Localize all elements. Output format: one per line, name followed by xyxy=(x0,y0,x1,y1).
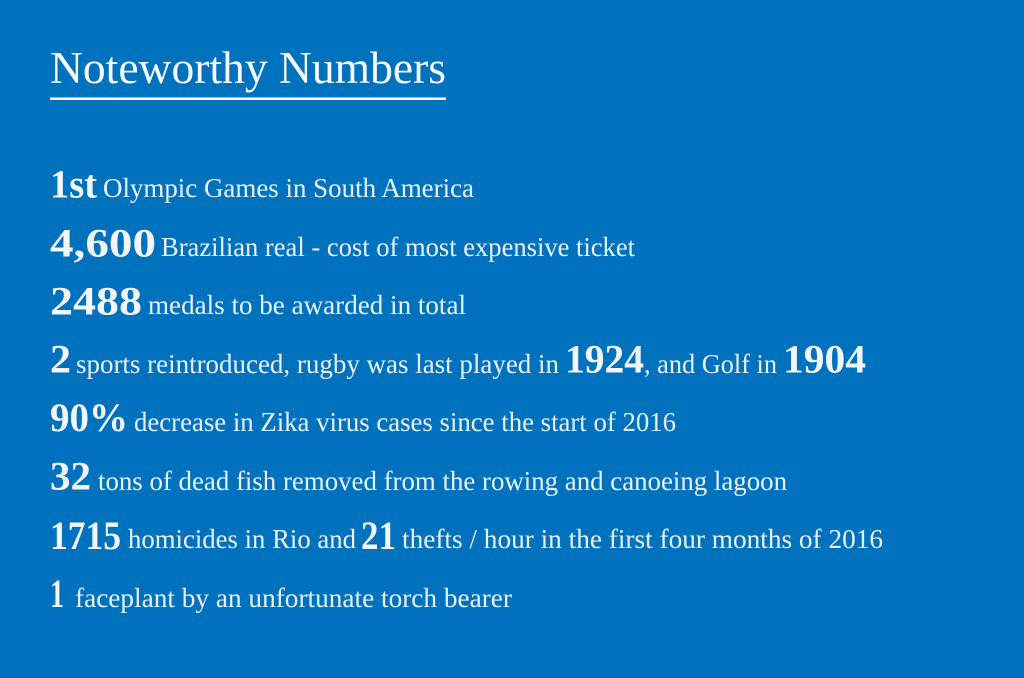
fact: 2 sports reintroduced: 1904 xyxy=(783,336,866,382)
fact: 1st Olympic Games: 1st xyxy=(50,162,98,206)
fact: 2488 medals: 2488 xyxy=(50,278,142,324)
fact: 90% decrease in Zika xyxy=(50,395,676,440)
fact: 1st Olympic Games: Olympic Games in South America xyxy=(103,173,474,203)
fact: 2 sports reintroduced: , and Golf in xyxy=(644,349,777,379)
fact: 2 sports reintroduced xyxy=(50,336,866,382)
fact: 4,600 ticket cost: Brazilian real - cost of most expensive ticket xyxy=(161,232,635,262)
fact: 1715 homicides and 21 thefts: homicides in Rio and xyxy=(128,524,356,554)
fact: 2 sports reintroduced: sports reintroduced, rugby was last played in xyxy=(76,349,559,379)
fact: 1st Olympic Games xyxy=(50,162,474,206)
fact: 4,600 ticket cost: 4,600 xyxy=(50,220,156,266)
fact: 90% decrease in Zika: 90% xyxy=(50,395,128,440)
fact: 1715 homicides and 21 thefts xyxy=(50,513,883,558)
fact: 32 tons of dead fish: tons of dead fish removed from the rowing and canoeing lagoon xyxy=(98,466,787,496)
fact: 1715 homicides and 21 thefts: 1715 xyxy=(50,513,121,558)
fact: 1715 homicides and 21 thefts: thefts / hour in the first four months of 2016 xyxy=(402,524,883,554)
fact: 1 faceplant: 1 xyxy=(50,571,64,616)
fact: 1715 homicides and 21 thefts: 21 xyxy=(361,513,396,558)
title: Noteworthy Numbers xyxy=(50,43,446,93)
fact: 2 sports reintroduced: 1924 xyxy=(565,336,644,382)
fact: 32 tons of dead fish xyxy=(50,454,787,498)
fact: 4,600 ticket cost xyxy=(50,220,635,266)
fact: 2 sports reintroduced: 2 xyxy=(50,336,71,382)
fact: 1 faceplant: faceplant by an unfortunate torch bearer xyxy=(75,583,512,613)
fact: 32 tons of dead fish: 32 xyxy=(50,454,91,498)
fact: 2488 medals xyxy=(50,278,466,324)
fact: 1 faceplant xyxy=(50,571,512,616)
fact: 2488 medals: medals to be awarded in total xyxy=(148,290,466,320)
fact: 90% decrease in Zika: decrease in Zika virus cases since the start of 2016 xyxy=(134,407,676,437)
